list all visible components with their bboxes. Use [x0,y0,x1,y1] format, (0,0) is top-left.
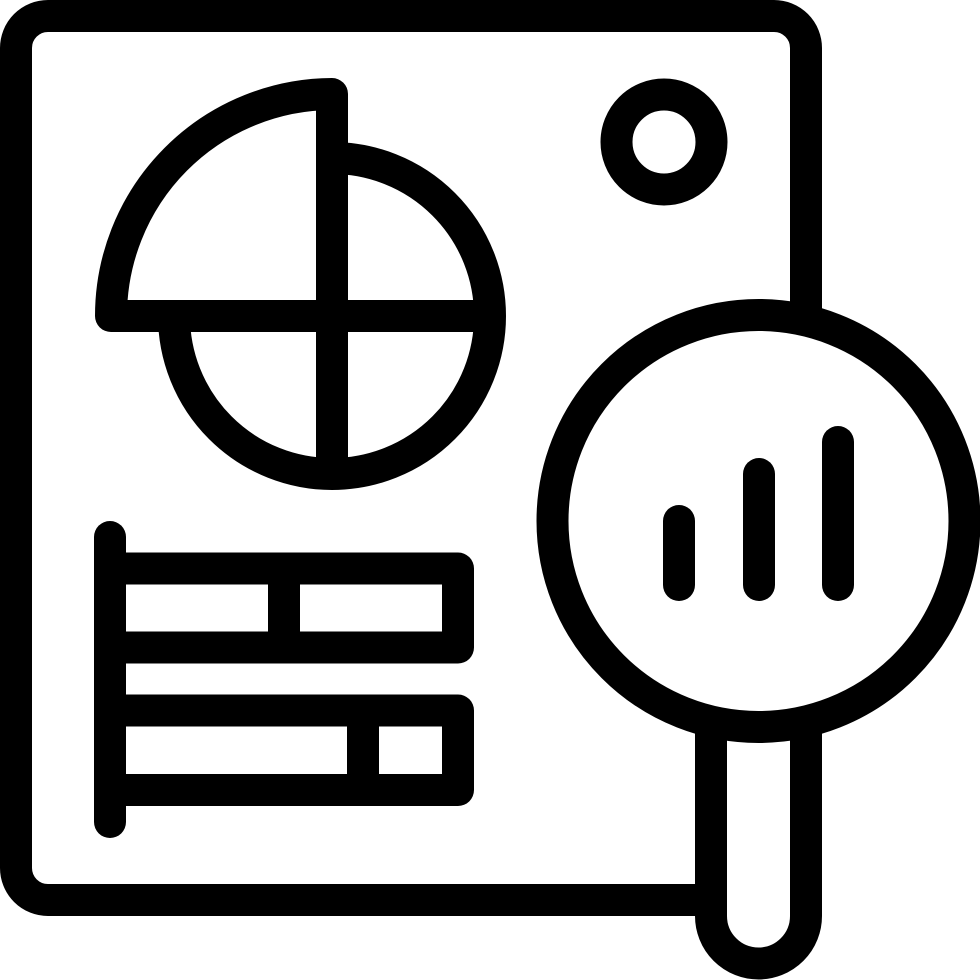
magnifier lens [552,315,964,727]
column three [822,442,854,585]
column two [743,474,775,585]
bar two [110,710,458,790]
pie chart [111,94,490,474]
bar chart axis [94,537,126,822]
magnifying glass [552,315,964,964]
small circle marker [616,94,712,190]
horizontal bar chart [110,537,458,822]
pie dividers [332,316,490,474]
bar one [110,568,458,648]
magnifier handle [711,730,806,964]
pie body: remaining circle [174,158,490,474]
pie slice: raised quarter [111,94,332,316]
column one [663,521,695,585]
document outline [16,16,806,900]
small column chart inside lens [679,442,838,585]
